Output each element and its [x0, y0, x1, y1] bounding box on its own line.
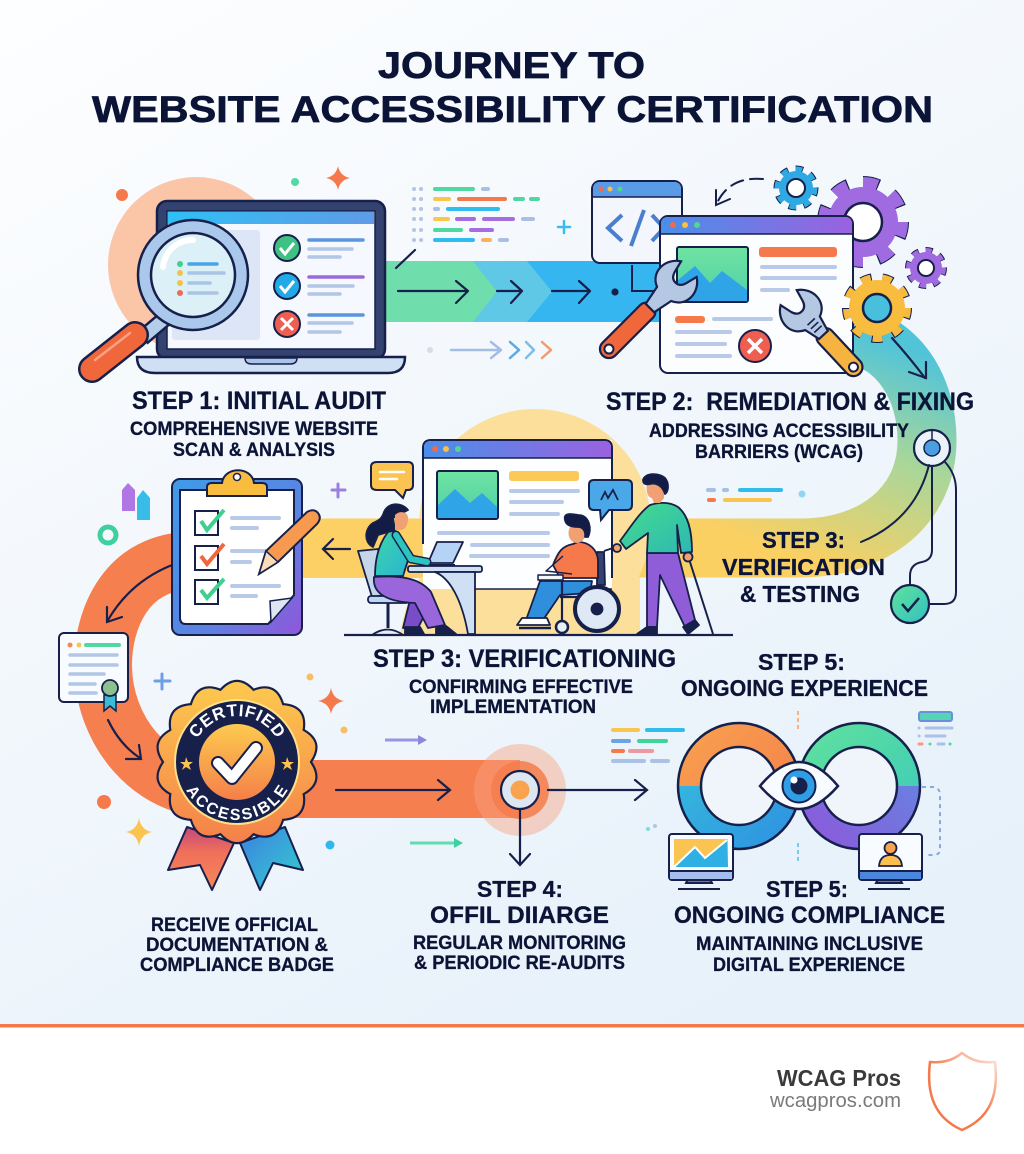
front leg — [374, 576, 445, 628]
arrow on orange curve upper — [107, 565, 172, 622]
shoes and footplate — [517, 618, 550, 625]
check mark — [218, 748, 256, 778]
step 2 label: ADDRESSING ACCESSIBILITY — [649, 420, 909, 442]
icon: monitor with user — [859, 834, 922, 889]
ring text — [186, 704, 288, 820]
step 4 label: STEP 4: — [477, 876, 563, 902]
step 5 label — [674, 876, 945, 976]
step 5 label: ONGOING COMPLIANCE — [674, 902, 945, 929]
code marks near infinity — [613, 730, 683, 761]
panel: step 3 people testing scene — [302, 409, 733, 641]
handle link — [604, 547, 616, 551]
icon: yellow wrench — [773, 283, 875, 388]
main browser window — [660, 216, 853, 373]
badge caption: DOCUMENTATION & — [146, 935, 328, 956]
step 3 center label — [373, 645, 676, 718]
lower chevron arrow row — [427, 342, 551, 358]
checklist results on screen — [274, 235, 363, 337]
figure: person in wheelchair — [517, 514, 619, 633]
step 5 upper label: STEP 5: — [758, 649, 845, 675]
step 5 upper label: ONGOING EXPERIENCE — [681, 675, 928, 701]
shoes — [405, 626, 456, 634]
arrow on orange band — [336, 780, 450, 800]
certified accessible badge — [156, 680, 318, 891]
hands — [613, 544, 621, 552]
ring stars — [180, 757, 294, 770]
armrest — [538, 575, 563, 580]
step 1 label — [130, 387, 386, 461]
ribbon tails — [168, 827, 303, 890]
torso — [375, 531, 409, 576]
step 4 label: OFFIL DIIARGE — [430, 902, 609, 929]
badge caption: COMPLIANCE BADGE — [140, 955, 334, 976]
scalloped seal — [158, 681, 316, 843]
step 2 label — [606, 388, 974, 463]
step 3 center label: IMPLEMENTATION — [430, 697, 596, 718]
arrows on top ribbon — [396, 250, 618, 303]
node and check connector for step 3 — [861, 430, 956, 623]
badge caption — [140, 915, 334, 976]
icon: large purple gear — [825, 184, 901, 260]
icon: magnifying glass — [92, 220, 248, 369]
check items — [195, 510, 279, 604]
badge caption: RECEIVE OFFICIAL — [151, 915, 318, 936]
brand url: wcagpros.com — [769, 1090, 901, 1112]
yellow band in front gap — [302, 519, 362, 578]
icon: plus — [558, 221, 570, 233]
yellow band left of window — [362, 519, 422, 578]
clipboard clip — [207, 470, 267, 496]
rear leg — [403, 598, 433, 628]
arm — [396, 535, 427, 562]
browser window — [423, 440, 612, 589]
ring text: CERTIFIED — [190, 704, 284, 736]
icon: pencil — [259, 510, 320, 574]
chair back — [597, 552, 605, 585]
chair — [358, 549, 409, 635]
laptop — [137, 201, 405, 373]
clip hole — [234, 474, 240, 480]
yellow floor backdrop — [400, 578, 640, 635]
sparkle accents around badge — [97, 674, 348, 850]
chat bubble blue — [589, 480, 632, 520]
panel: clipboard checklist — [172, 470, 320, 635]
legs — [647, 553, 695, 627]
panel: step 2 remediation illustration — [558, 170, 943, 388]
hair — [643, 474, 668, 494]
desk — [408, 542, 482, 634]
hair — [565, 514, 590, 537]
floor line — [344, 634, 733, 636]
shoes — [637, 620, 699, 634]
arrow on orange curve lower — [108, 720, 141, 759]
arrow to step 3 — [892, 338, 926, 378]
torso and arms — [620, 503, 692, 553]
step 1 label: COMPREHENSIVE WEBSITE — [130, 418, 378, 440]
icon: orange wrench — [587, 254, 704, 371]
step 3 label right: & TESTING — [740, 581, 860, 607]
step 5 upper label — [681, 649, 928, 701]
step 5 label: STEP 5: — [766, 876, 848, 902]
step 2 label: BARRIERS (WCAG) — [695, 441, 863, 463]
step 4 label: REGULAR MONITORING — [413, 933, 626, 954]
inner gold disc — [199, 724, 275, 800]
icon: certificate document — [59, 633, 128, 711]
icon: small gradient arrows — [385, 735, 463, 848]
title — [92, 45, 933, 130]
step 3 center label: STEP 3: VERIFICATIONING — [373, 645, 676, 673]
left arrow — [323, 539, 350, 559]
decorative code marks by step 3 — [708, 490, 806, 500]
icon: yellow gear — [848, 279, 906, 337]
panel: step 1 laptop audit illustration — [92, 177, 405, 373]
peach circle — [108, 177, 284, 353]
icon: monitor with chart — [669, 834, 733, 889]
connector from ribbon — [632, 265, 658, 291]
face — [568, 523, 586, 543]
footer — [0, 1024, 1024, 1154]
step 3 label right — [722, 527, 885, 607]
step 1 label: SCAN & ANALYSIS — [173, 439, 335, 461]
legs — [526, 581, 592, 620]
torso — [553, 542, 598, 578]
step 2 label: STEP 2: REMEDIATION & FIXING — [606, 388, 974, 416]
back hair — [366, 504, 408, 547]
figure: woman at desk — [358, 504, 482, 635]
icon: dashed return arrow — [716, 179, 763, 205]
step 5 label: DIGITAL EXPERIENCE — [713, 955, 905, 976]
top right mini panel — [919, 712, 952, 744]
frame — [560, 580, 580, 622]
brand name: WCAG Pros — [777, 1065, 901, 1091]
decorative sparkles top left — [116, 166, 350, 201]
title: JOURNEY TO — [378, 45, 645, 86]
step 4 label: & PERIODIC RE-AUDITS — [414, 953, 625, 974]
arm fill — [396, 535, 427, 562]
code snippet lines — [414, 189, 538, 240]
step 3 label right: STEP 3: — [762, 527, 845, 553]
check mark fill — [218, 748, 256, 778]
ring text: ACCESSIBLE — [186, 784, 288, 820]
path ribbon: orange curve — [103, 561, 520, 789]
step 5 label: MAINTAINING INCLUSIVE — [696, 934, 923, 955]
icon: eye — [760, 762, 838, 809]
title: WEBSITE ACCESSIBILITY CERTIFICATION — [92, 89, 933, 130]
chat bubble yellow — [371, 462, 413, 498]
icon: code window — [592, 181, 682, 263]
dark ring — [175, 700, 299, 824]
infinity monitoring loop — [678, 723, 920, 849]
step 1 label: STEP 1: INITIAL AUDIT — [132, 387, 386, 415]
figure: person walking with cane — [613, 474, 713, 634]
icon: shield — [929, 1053, 996, 1130]
path ribbon: green to blue band — [380, 261, 670, 322]
face — [647, 484, 664, 503]
icon: small purple gear — [909, 251, 943, 285]
yellow backdrop circle — [419, 409, 650, 578]
arm — [546, 556, 572, 574]
path ribbon: teal to yellow curve — [300, 333, 927, 548]
step 4 orange node — [474, 744, 647, 865]
face — [395, 512, 408, 530]
step 4 label — [413, 876, 626, 974]
step 3 label right: VERIFICATION — [722, 554, 885, 580]
step 3 center label: CONFIRMING EFFECTIVE — [409, 677, 633, 698]
decorative shapes left of clipboard — [100, 483, 345, 543]
icon: small blue gear — [778, 170, 814, 206]
dashed accents around loop — [646, 711, 940, 862]
